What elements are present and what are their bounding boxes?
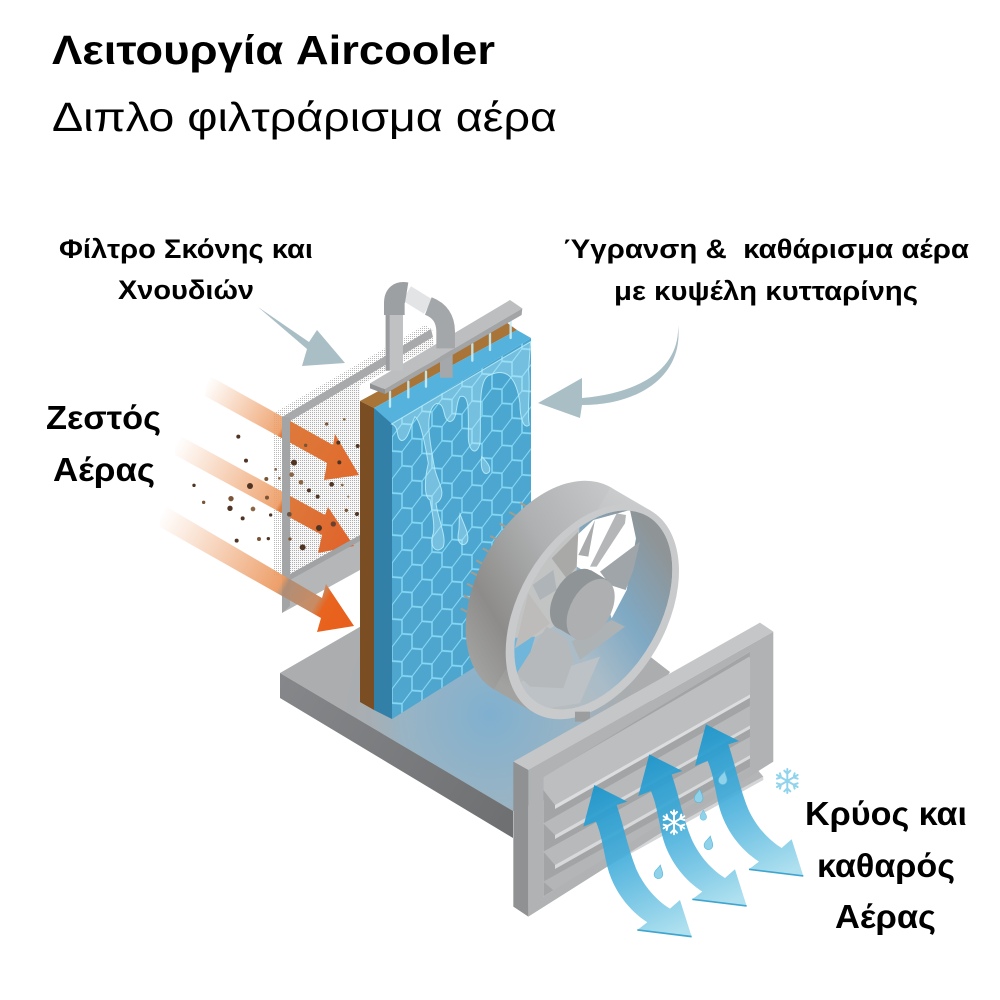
water drips xyxy=(392,342,531,550)
snowflake: right xyxy=(777,769,798,793)
label: cold and clean air: Αέρας xyxy=(835,898,936,935)
fan xyxy=(460,480,679,722)
water droplets xyxy=(653,770,729,879)
louvers xyxy=(543,657,767,896)
outlet grille xyxy=(513,623,803,937)
cold air arrows xyxy=(583,724,803,937)
label: hot air: Αέρας xyxy=(53,451,155,488)
fan opening and blades xyxy=(514,510,672,710)
arrow: pointer to filter xyxy=(258,307,345,366)
label: dust and lint filter xyxy=(59,234,313,305)
subtitle: Διπλο φιλτράρισμα αέρα xyxy=(52,94,557,140)
fan drum xyxy=(430,450,715,750)
label: dust and lint filter: Χνουδιών xyxy=(118,275,254,305)
label: hot air xyxy=(46,399,161,488)
arrow: pointer to cellulose pad xyxy=(538,325,679,418)
base plate xyxy=(280,540,670,838)
brown pre-filter frame xyxy=(360,322,517,710)
snowflake: on arrow xyxy=(664,810,684,834)
label: cold and clean air: καθαρός xyxy=(817,847,955,884)
hot air arrow: lower xyxy=(160,503,354,632)
blue cellulose honeycomb pad xyxy=(374,330,531,719)
label: humidification and air cleaning xyxy=(563,234,969,306)
label: humidification and air cleaning: με κυψέλη κυτταρίνης xyxy=(614,276,918,306)
fan support xyxy=(575,712,590,722)
title: Λειτουργία Aircooler xyxy=(52,27,495,73)
label: dust and lint filter: Φίλτρο Σκόνης και xyxy=(59,234,313,264)
filter metal rails xyxy=(282,329,433,613)
fan bristles xyxy=(461,503,528,613)
water pipe and distribution bar xyxy=(370,292,522,407)
label: cold and clean air: Κρύος και xyxy=(805,795,967,832)
grille frame xyxy=(513,623,773,917)
dust filter panel and mesh xyxy=(274,325,434,613)
grille interior xyxy=(543,652,750,897)
hot air arrows: upper two xyxy=(175,375,359,553)
label: humidification and air cleaning: Ύγρανση & καθάρισμα αέρα xyxy=(563,234,969,264)
label: cold and clean air xyxy=(805,795,967,935)
fan hub xyxy=(540,560,625,648)
dust particles xyxy=(192,418,360,550)
label: hot air: Ζεστός xyxy=(46,399,161,436)
